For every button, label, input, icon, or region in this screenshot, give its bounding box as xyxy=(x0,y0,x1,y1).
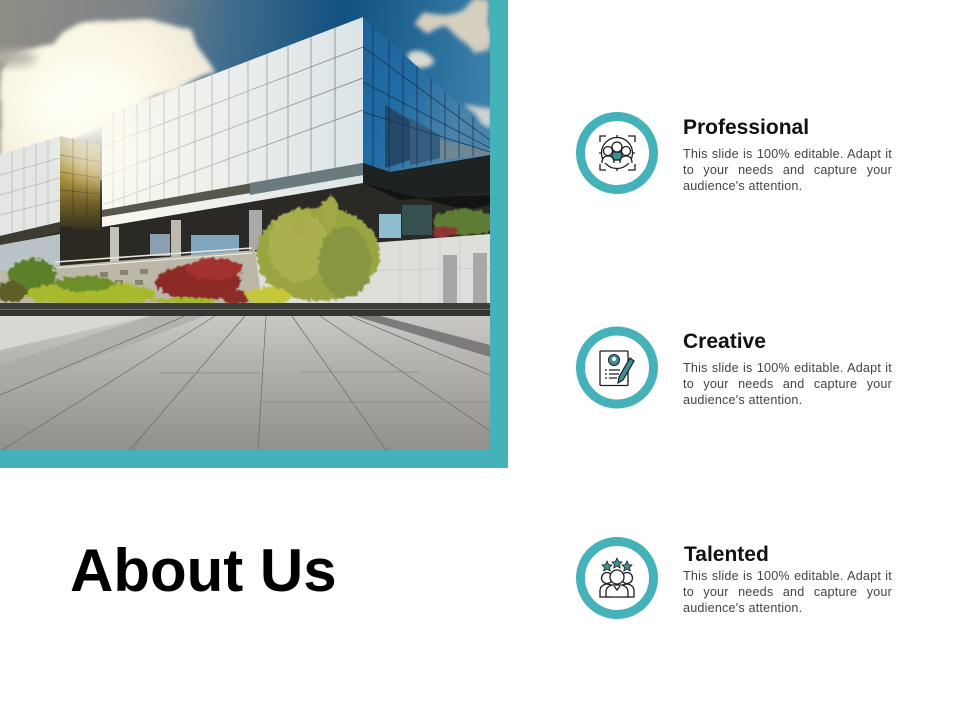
sun glow over building edge xyxy=(60,105,150,185)
icon: professional team in target ring xyxy=(576,112,658,194)
paved plaza xyxy=(0,316,490,450)
clouds xyxy=(0,0,490,165)
text: creative description: This slide is 100% editable. Adapt it xyxy=(683,361,892,375)
title: About Us xyxy=(70,537,337,604)
stone wall and railing xyxy=(0,248,262,303)
heading: Professional xyxy=(683,116,892,193)
heading: Talented xyxy=(683,543,892,615)
background foliage xyxy=(432,209,497,237)
text: talented description: audience's attention. xyxy=(683,601,802,615)
text: talented description: to your needs and capture your xyxy=(683,585,892,599)
shrubs and flowers xyxy=(0,195,380,306)
heading: Talented: Talented xyxy=(684,543,769,566)
text: creative description xyxy=(683,361,892,407)
dark curb xyxy=(0,303,490,316)
panel: teal photo frame xyxy=(0,0,508,468)
main building blue side xyxy=(363,17,490,210)
text: talented description xyxy=(683,569,892,615)
heading: Creative xyxy=(683,330,892,407)
ground-floor columns and windows xyxy=(110,205,432,265)
background mass behind planting xyxy=(0,180,490,305)
text: professional description: This slide is 100% editable. Adapt it xyxy=(683,147,892,161)
text: professional description xyxy=(683,147,892,193)
left building xyxy=(0,136,110,272)
icon: three people with stars xyxy=(576,537,658,619)
text: talented description: This slide is 100% editable. Adapt it xyxy=(683,569,892,583)
text: professional description: to your needs and capture your xyxy=(683,163,892,177)
text: creative description: to your needs and capture your xyxy=(683,377,892,391)
heading: Professional: Professional xyxy=(683,116,809,139)
icon: document and pencil xyxy=(576,326,658,408)
main building glass face xyxy=(102,17,363,227)
photo: modern glass office building with plaza xyxy=(0,0,490,450)
sky xyxy=(0,0,490,320)
text: creative description: audience's attention. xyxy=(683,393,802,407)
heading: Creative: Creative xyxy=(683,330,766,353)
text: professional description: audience's attention. xyxy=(683,179,802,193)
white plinth wall xyxy=(250,234,490,303)
